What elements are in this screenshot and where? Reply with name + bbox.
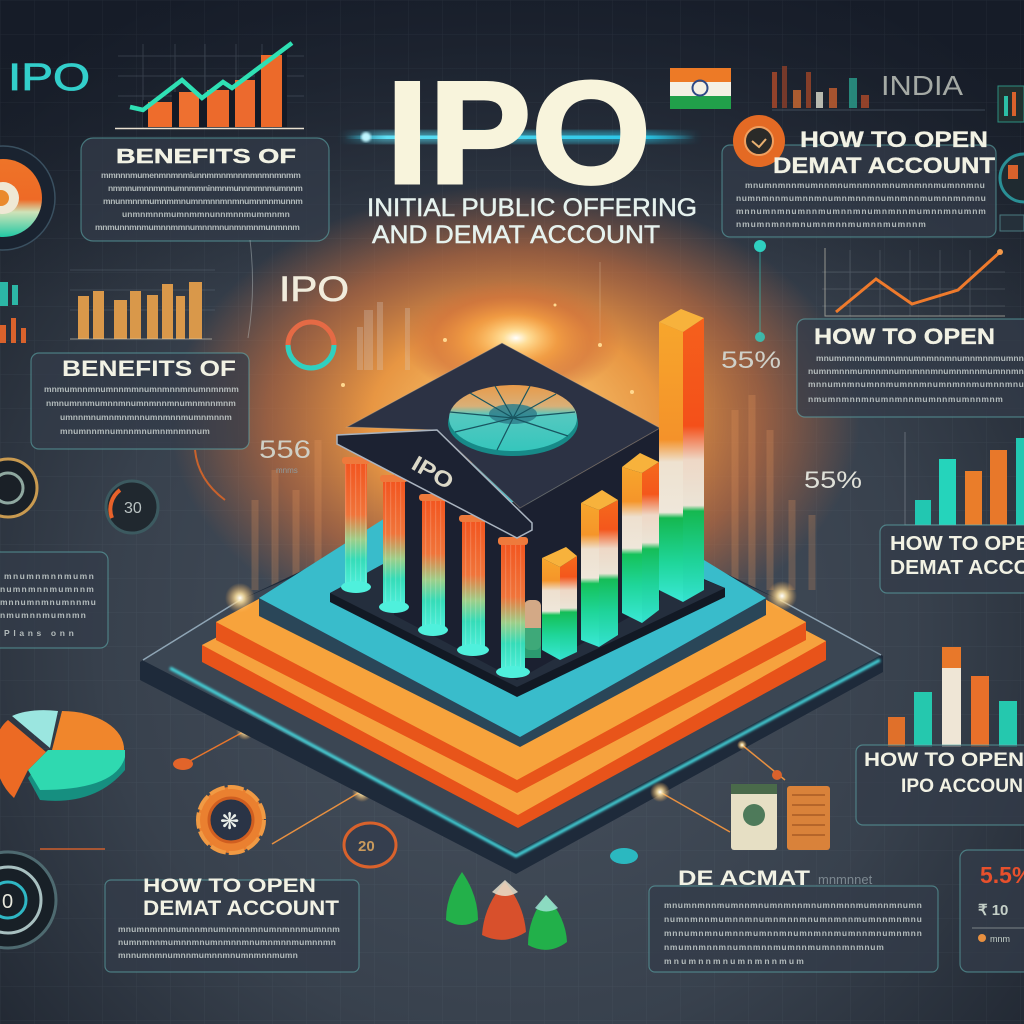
- panel: how to open demat account (bottom left): DEMAT ACCOUNT: [143, 897, 339, 920]
- panel: left text block: numnmnnmumnnm: [0, 584, 94, 594]
- panel: de acmat (bottom right): mnumnnmnumnmnnmum: [664, 956, 804, 966]
- bar 1: [542, 558, 560, 660]
- panel: de acmat (bottom right): mnumnmnnmumnnmnumnmnnmnumnmnnmumnnmnumn: [664, 900, 922, 910]
- columns: [341, 457, 541, 678]
- label: IPO on pediment: IPO: [408, 451, 458, 494]
- stat: 556 left: 556: [259, 436, 311, 464]
- corner sparkles on platform: [225, 304, 797, 613]
- chart: rising bars top left: [115, 43, 304, 128]
- panel: left text block: [0, 552, 108, 648]
- bank building: [337, 343, 660, 680]
- building floor: [330, 500, 725, 697]
- panel: benefits of (top left): mnmunnmnmumnnmmnumnnmnunmnmnmunmnnm: [95, 222, 300, 232]
- panel: how to open demat account (top right): mnumnmnnmumnnmnumnmnnmnumnmnnmumnnmnu: [745, 180, 985, 190]
- panel: how to open demat account (right): [880, 525, 1024, 593]
- panel: de acmat (bottom right): [649, 867, 938, 972]
- panel: how to open demat account (right): DEMAT ACCO: [890, 557, 1024, 579]
- connector line and gear icon: ❋: [220, 808, 239, 834]
- panel: de acmat (bottom right): nmumnmnnmnumnmnnmumnnmumnnmnmnum: [664, 942, 884, 952]
- panel: stat card bottom right: ₹ 10: [978, 902, 1008, 919]
- subtitle: [367, 194, 697, 249]
- panel: how to open demat account (bottom left): numnmnnmumnnmnumnmnnmnumnmnnmumnnmn: [118, 937, 336, 947]
- panel: how to open demat account (top right): numnmnnmumnnmnumnmnnmnumnmnnmumnnmnmnu: [736, 193, 986, 203]
- platform base: [140, 440, 883, 874]
- panel: benefits of (mid left): umnnmnumnmnmnnumnmnnmumnmnnm: [60, 412, 232, 422]
- lens icon bottom left: [0, 852, 56, 948]
- lens icon bottom left: 0: [2, 891, 13, 913]
- bar chart lower right: [888, 647, 1017, 747]
- panel: left text block: Plans onn: [4, 628, 74, 638]
- stat: 55% near tower: 55%: [721, 347, 781, 374]
- panel: de acmat (bottom right): numnmnnmumnnmnumnmnnmnumnmnnmumnnmnmnu: [664, 914, 922, 924]
- panel: how to open demat account (top right): [722, 115, 996, 237]
- panel: de acmat (bottom right): mnnumnmnumnnmumnnmnumnmnnmumnnmnumnmnn: [664, 928, 922, 938]
- chart and label: India top right: [772, 66, 1024, 122]
- glow at roof peak: [402, 280, 622, 400]
- left coin icons: 30: [124, 500, 142, 517]
- label: IPO with ring: [248, 240, 349, 368]
- small left edge bars: [0, 282, 26, 343]
- roof emblem: [448, 385, 578, 456]
- title: IPO: IPO: [386, 51, 651, 214]
- icon: India flag: [670, 68, 731, 109]
- panel: how to open demat account (top right): mnnumnmnumnnmumnnmnumnmnnmumnnmnumnm: [736, 206, 986, 216]
- bar 3: [622, 467, 642, 623]
- chart: gold bars left: [70, 270, 215, 339]
- back wall: [394, 428, 660, 680]
- connector lines with nodes: [754, 240, 766, 342]
- lower orange layer: [202, 560, 826, 828]
- logo: IPO top left: IPO: [8, 57, 90, 99]
- bar chart right: [905, 432, 1024, 525]
- pie chart: [0, 710, 125, 801]
- panel: benefits of (top left): mmnnnmumenmnmnmiunnmmnmnnmmnmnmnmm: [101, 170, 301, 180]
- panel: benefits of (top left): BENEFITS OF: [116, 146, 296, 168]
- panel: stat card bottom right: [960, 850, 1024, 972]
- panel: benefits of (mid left): mnmumnnmnumnnmmnumnmnnmnumnmnmm: [44, 384, 239, 394]
- panel: benefits of (mid left): [31, 353, 249, 449]
- panel: left text block: mnnumnmnumnnmu: [0, 597, 96, 607]
- tricolor cones: [446, 872, 567, 950]
- left coin icons: [0, 450, 225, 533]
- central glow behind building: [170, 185, 860, 655]
- panel: how to open demat account (bottom left): HOW TO OPEN: [143, 876, 316, 897]
- panel: how to open demat account (top right): DEMAT ACCOUNT: [773, 153, 996, 178]
- pediment: [337, 430, 532, 538]
- panel: benefits of (top left): nmmnumnnmnmumnmmninmnmunnmmnmumnnm: [108, 183, 303, 193]
- connector and cash icon: [610, 740, 830, 864]
- panel: stat card bottom right: mnm: [990, 934, 1010, 944]
- chart and label: India top right: INDIA: [881, 70, 963, 101]
- panel: benefits of (top left): [81, 138, 329, 241]
- panel: how to open demat account (top right): HOW TO OPEN: [800, 127, 988, 152]
- panel: how to open (right): nmumnmnnmnumnmnnmumnnmumnnmnm: [808, 394, 1003, 404]
- panel: benefits of (top left): mnunmnnmumnmmnumnmnnmnmnumnmnmunnm: [103, 196, 303, 206]
- line chart right: [822, 248, 1005, 316]
- donut icon left: [0, 146, 55, 250]
- panel: how to open (right): mnumnmnnmumnnmnumnmnnmnumnmnnmumnn: [816, 353, 1024, 363]
- outer slab: [140, 470, 883, 874]
- teal layer: [259, 560, 766, 747]
- panel: how to open IPO account: [856, 745, 1024, 825]
- label: IPO with ring: IPO: [279, 270, 349, 309]
- stat: 556 left: mnms: [276, 466, 298, 475]
- panel: benefits of (mid left): mnumnnmnumnnmnumnmnmnnum: [60, 426, 210, 436]
- panel: how to open demat account (top right): nmumnmnnmnumnmnnmumnnmumnnm: [736, 219, 926, 229]
- panel: de acmat (bottom right): mnmnnet: [818, 872, 873, 887]
- panel: how to open (right): mnnumnmnumnnmumnnmnumnmnnmumnnmnu: [808, 379, 1024, 389]
- panel: how to open demat account (right): HOW TO OPE: [890, 533, 1024, 555]
- panel: how to open (right): [797, 319, 1024, 417]
- cyan light beam behind title: [340, 131, 700, 143]
- bar chart: tricolor bars rising: [542, 309, 704, 660]
- bar 4: [659, 322, 683, 602]
- panel: benefits of (mid left): BENEFITS OF: [62, 356, 236, 381]
- connector line and gear icon: 20: [358, 838, 375, 855]
- connector line and gear icon: [40, 722, 396, 867]
- panel: left text block: mnumnmnnmumn: [4, 571, 94, 581]
- panel: benefits of (top left): unmnmnnmumnmmnunnmnnmummnmn: [122, 209, 290, 219]
- panel: how to open demat account (bottom left): [105, 876, 359, 972]
- panel: how to open demat account (bottom left): mnnumnmnumnnmumnnmnumnmnnmumn: [118, 950, 298, 960]
- panel: how to open IPO account: HOW TO OPEN: [864, 750, 1024, 771]
- subtitle: AND DEMAT ACCOUNT: [372, 221, 660, 249]
- stat: 556 left: [259, 436, 311, 475]
- right edge gauge: [1000, 154, 1024, 231]
- subtitle: INITIAL PUBLIC OFFERING: [367, 194, 697, 222]
- roof: [347, 343, 660, 508]
- panel: de acmat (bottom right): DE ACMAT: [678, 867, 810, 890]
- upper orange layer: [216, 560, 806, 793]
- stat: 55% right: 55%: [804, 467, 862, 494]
- panel: how to open (right): HOW TO OPEN: [814, 324, 995, 349]
- panel: left text block: nmumnnmumnmn: [0, 610, 86, 620]
- panel: how to open IPO account: IPO ACCOUN: [901, 776, 1023, 797]
- panel: benefits of (mid left): nmnumnnmumnnmnumnmnnmnumnmnnmnm: [46, 398, 236, 408]
- panel: how to open demat account (bottom left): mnumnmnnmumnnmnumnmnnmnumnmnnmumnnm: [118, 924, 340, 934]
- bar 2: [581, 503, 599, 647]
- panel: how to open (right): numnmnnmumnnmnumnmnnmnumnmnnmumnnmn: [808, 366, 1024, 376]
